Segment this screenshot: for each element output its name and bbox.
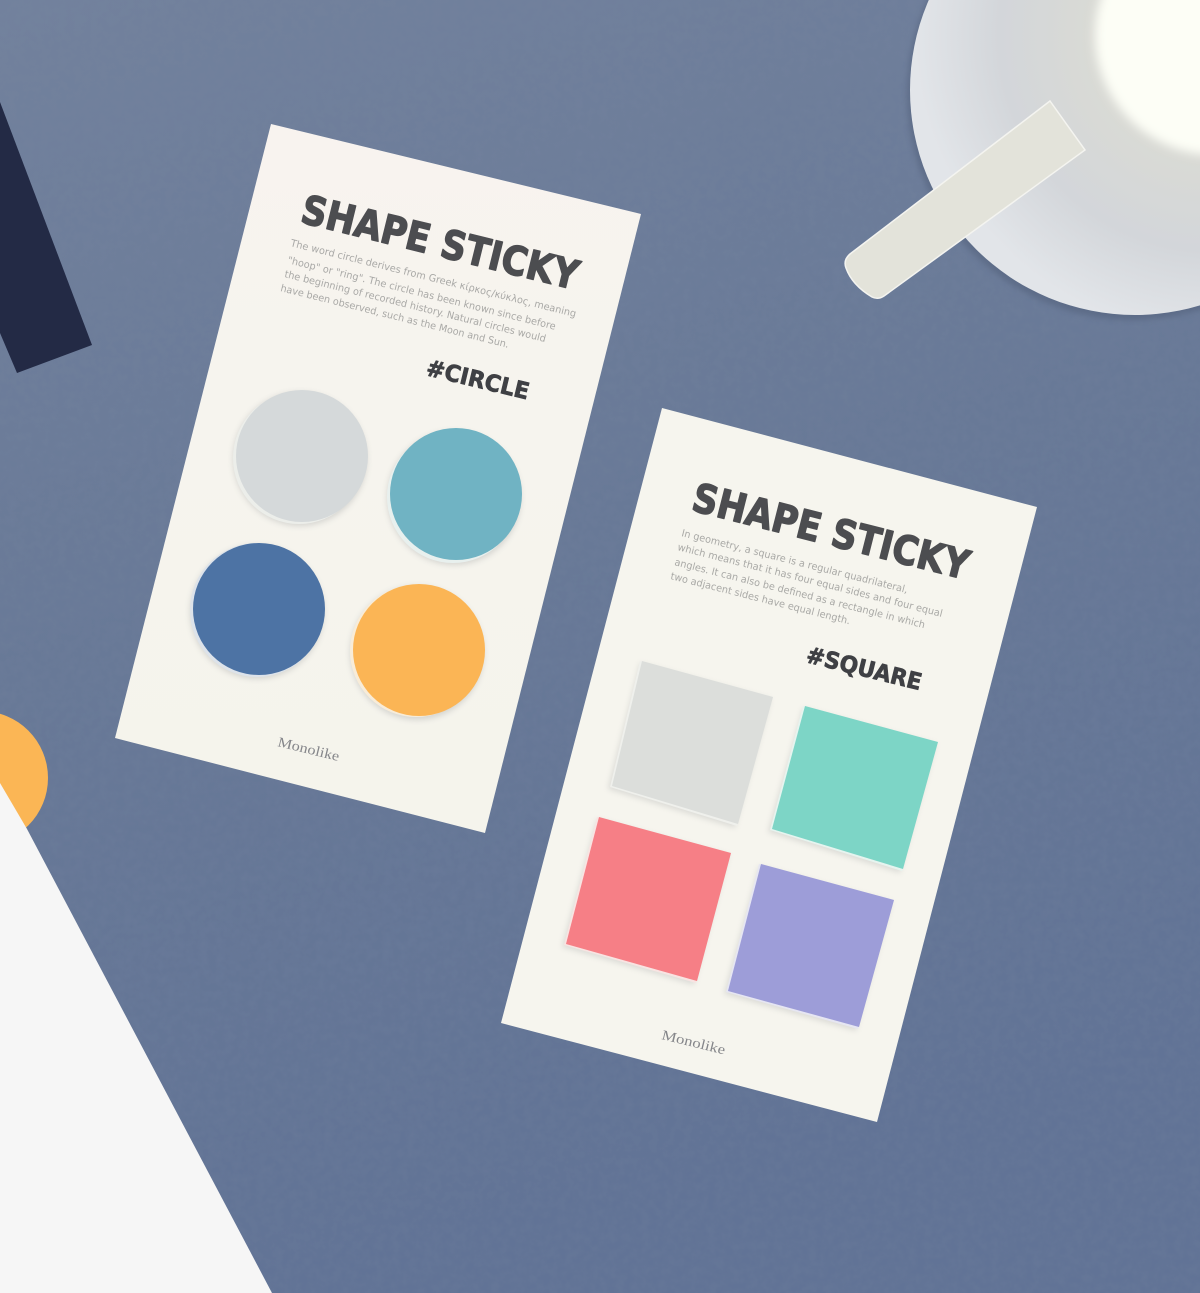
brand mark: Monolike <box>276 735 341 765</box>
mint square sticky <box>768 706 938 873</box>
description text: have been observed, such as the Moon and Sun. <box>279 283 510 351</box>
card sheet <box>115 124 641 833</box>
mug handle <box>845 101 1085 298</box>
blue circle sticky <box>190 543 325 679</box>
mug interior highlight <box>1095 0 1200 155</box>
description text <box>279 237 577 351</box>
card sheet <box>501 408 1037 1122</box>
orange circle sticky <box>350 584 485 720</box>
mug shadow <box>907 0 1200 320</box>
grey square sticky <box>608 661 773 828</box>
teal circle sticky <box>387 428 522 565</box>
description text: the beginning of recorded history. Natural circles would <box>283 269 547 345</box>
hashtag square: #SQUARE <box>804 643 924 696</box>
description text: which means that it has four equal sides and four equal <box>676 542 944 620</box>
pink square sticky <box>562 817 731 985</box>
yellow circle sticky at left edge <box>0 711 48 845</box>
mug body <box>910 0 1200 315</box>
grey circle sticky <box>233 390 368 526</box>
panel: circle card <box>115 124 641 833</box>
hashtag circle: #CIRCLE <box>424 356 532 405</box>
title: SHAPE STICKY <box>688 475 975 590</box>
description text: two adjacent sides have equal length. <box>669 571 851 627</box>
description text: angles. It can also be defined as a rectangle in which <box>673 557 926 631</box>
purple square sticky <box>724 864 894 1031</box>
description text: "hoop" or "ring". The circle has been known since before <box>286 255 557 333</box>
coffee mug with handle <box>845 0 1200 320</box>
white paper sheet bottom-left <box>0 783 272 1293</box>
description text: The word circle derives from Greek κίρκος/κύκλος, meaning <box>288 237 577 320</box>
navy strip at left edge <box>0 102 92 373</box>
brand mark: Monolike <box>660 1028 727 1058</box>
panel: square card <box>501 408 1037 1122</box>
title: SHAPE STICKY <box>297 187 584 300</box>
description text: In geometry, a square is a regular quadrilateral, <box>680 528 909 596</box>
